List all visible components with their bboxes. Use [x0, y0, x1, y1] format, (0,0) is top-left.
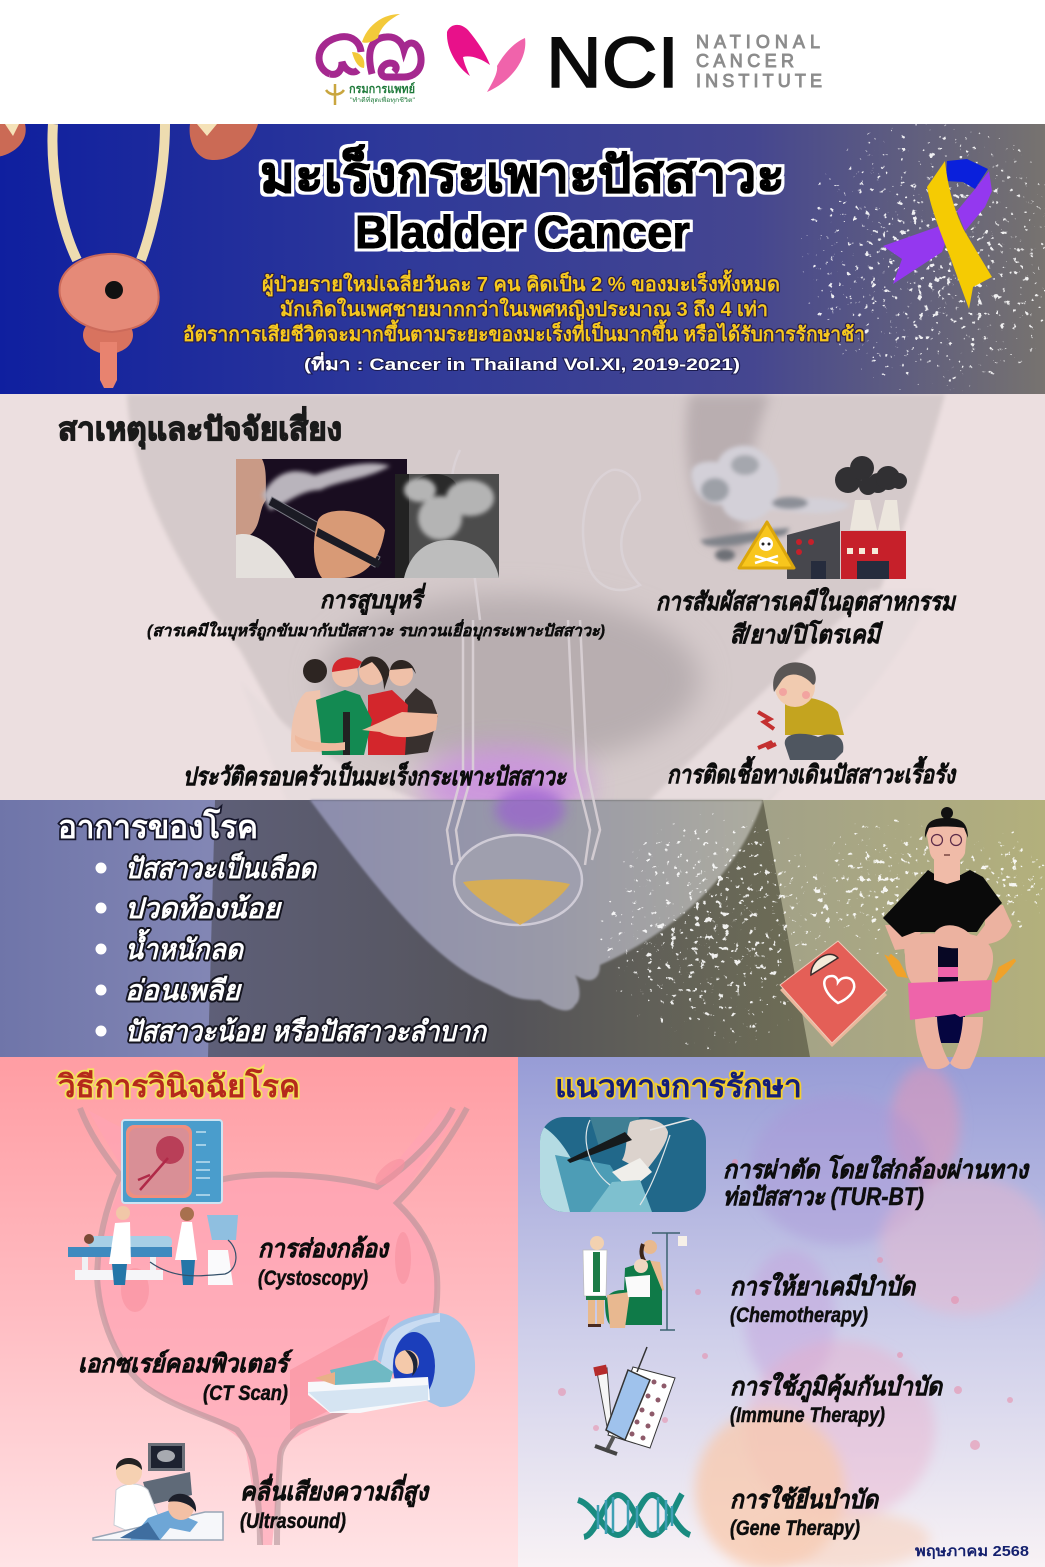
statistics text: [183, 269, 865, 346]
caption: immune therapy: การใช้ภูมิคุ้มกันบำบัด: [730, 1372, 944, 1402]
decorative anatomy lines: [447, 450, 640, 865]
caption: CT scan: เอกซเรย์คอมพิวเตอร์: [78, 1349, 294, 1378]
caption: ultrasound: (Ultrasound): [240, 1510, 346, 1533]
decorative bladder outline: [100, 1206, 434, 1545]
heading: treatment: แนวทางการรักษา: [555, 1069, 802, 1104]
icon: urinary tract: [0, 124, 258, 388]
caption: CT scan: [78, 1349, 294, 1405]
caption: urinary infection: การติดเชื้อทางเดินปัสสาวะเรื้อรัง: [667, 756, 956, 789]
caption: chemical exposure: สี/ยาง/ปิโตรเคมี: [730, 619, 884, 649]
caption: cystoscopy: (Cystoscopy): [258, 1267, 368, 1290]
statistics text: อัตราการเสียชีวิตจะมากขึ้นตามระยะของมะเร็งที่เป็นมากขึ้น หรือได้รับการรักษาช้า: [183, 319, 865, 346]
panel: symptoms: [58, 807, 1015, 1069]
logo: department of medical services: กรมการแพทย์: [349, 82, 415, 96]
caption: immune therapy: (Immune Therapy): [730, 1404, 885, 1427]
subtitle: Bladder Cancer: [355, 206, 690, 258]
decorative torso upper: [127, 394, 945, 823]
decorative speckle: [600, 810, 1045, 1050]
symptom list: [96, 851, 488, 1047]
heading: causes: สาเหตุและปัจจัยเสี่ยง: [58, 406, 342, 450]
caption: TUR-BT: การผ่าตัด โดยใส่กล้องผ่านทาง: [723, 1154, 1030, 1184]
logo: NCI wordmark: NATIONAL: [696, 32, 820, 52]
icon: sick man: [758, 662, 844, 760]
symptom list: น้ำหนักลด: [125, 928, 245, 965]
logo band: [0, 0, 1045, 124]
caption: TUR-BT: [723, 1154, 1030, 1211]
caption: gene therapy: การใช้ยีนบำบัด: [730, 1485, 880, 1514]
caption: CT scan: (CT Scan): [203, 1382, 288, 1405]
logo: department of medical services: "ทำดีที่สุดเพื่อทุกชีวิต": [350, 96, 415, 104]
caption: cystoscopy: [258, 1235, 390, 1290]
icon: factory and pollution: [691, 446, 907, 579]
decorative dots: [558, 1159, 1013, 1450]
caption: chemical exposure: [656, 587, 957, 649]
symptom list: ปัสสาวะน้อย หรือปัสสาวะลำบาก: [125, 1016, 488, 1047]
icon: syringe and pills: [593, 1347, 675, 1454]
caption: immune therapy: [730, 1372, 944, 1427]
logo: NCI wordmark: CANCER: [696, 51, 794, 71]
icon: awareness ribbon: [883, 159, 992, 309]
icon: family group: [291, 656, 438, 755]
panel: treatment: [518, 1057, 1045, 1567]
title: มะเร็งกระเพาะปัสสาวะ: [260, 144, 785, 203]
decorative speckle: [800, 115, 1045, 395]
caption: TUR-BT: ท่อปัสสาวะ (TUR-BT): [723, 1183, 924, 1211]
logo: NCI wordmark: INSTITUTE: [696, 71, 822, 91]
decorative darker patches: [121, 1154, 411, 1430]
caption: chemotherapy: [730, 1272, 917, 1327]
panel: causes and risk factors: [58, 406, 957, 791]
caption: chemotherapy: การให้ยาเคมีบำบัด: [730, 1272, 917, 1301]
logo: pink butterfly: [447, 25, 525, 92]
icon: red weighing scale: [780, 941, 887, 1047]
statistics text: ผู้ป่วยรายใหม่เฉลี่ยวันละ 7 คน คิดเป็น 2 % ของมะเร็งทั้งหมด: [262, 269, 780, 298]
icon: woman with abdominal pain: [883, 807, 1015, 1069]
date stamp: พฤษภาคม 2568: [915, 1543, 1029, 1560]
icon: chemotherapy: [583, 1233, 687, 1330]
caption: gene therapy: [730, 1485, 880, 1540]
icon: cystoscopy: [68, 1120, 238, 1285]
panel: header banner: [0, 115, 1045, 395]
logo: NCI wordmark: [546, 24, 822, 103]
heading: symptoms: อาการของโรค: [58, 808, 258, 845]
heading: diagnosis: วิธีการวินิจฉัยโรค: [57, 1068, 300, 1104]
caption: smoking: (สารเคมีในบุหรี่ถูกขับมากับปัสสาวะ รบกวนเยื่อบุกระเพาะปัสสาวะ): [147, 619, 605, 641]
caption: ultrasound: [240, 1473, 430, 1533]
caption: chemical exposure: การสัมผัสสารเคมีในอุตสาหกรรม: [656, 587, 957, 617]
caption: smoking: การสูบบุหรี่: [320, 582, 426, 615]
decorative watercolor blobs: [695, 1065, 1045, 1567]
decorative thigh and hands: [208, 788, 810, 1057]
symptom list: อ่อนเพลีย: [125, 975, 243, 1006]
image: smoking photos: [236, 459, 499, 578]
icon: DNA helix: [578, 1494, 690, 1537]
logo: department of medical services: [319, 14, 421, 105]
panel: body background: [0, 394, 1045, 1057]
caption: chemotherapy: (Chemotherapy): [730, 1304, 868, 1327]
icon: ultrasound: [93, 1443, 223, 1540]
symptom list: ปวดท้องน้อย: [125, 893, 283, 924]
caption: ultrasound: คลื่นเสียงความถี่สูง: [240, 1473, 430, 1507]
statistics text: มักเกิดในเพศชายมากกว่าในเพศหญิงประมาณ 3 ถึง 4 เท่า: [280, 297, 768, 321]
source text: (ที่มา : Cancer in Thailand Vol.XI, 2019-2021): [304, 352, 740, 374]
symptom list: ปัสสาวะเป็นเลือด: [125, 851, 318, 884]
logo: NCI wordmark: NCI: [546, 24, 679, 103]
caption: gene therapy: (Gene Therapy): [730, 1517, 860, 1540]
caption: family history: ประวัติครอบครัวเป็นมะเร็งกระเพาะปัสสาวะ: [183, 761, 567, 791]
panel: diagnosis: [0, 1057, 518, 1567]
caption: smoking: [147, 582, 605, 641]
icon: CT scanner: [308, 1313, 475, 1413]
image: TUR-BT surgery: [540, 1117, 706, 1212]
caption: cystoscopy: การส่องกล้อง: [258, 1235, 390, 1263]
